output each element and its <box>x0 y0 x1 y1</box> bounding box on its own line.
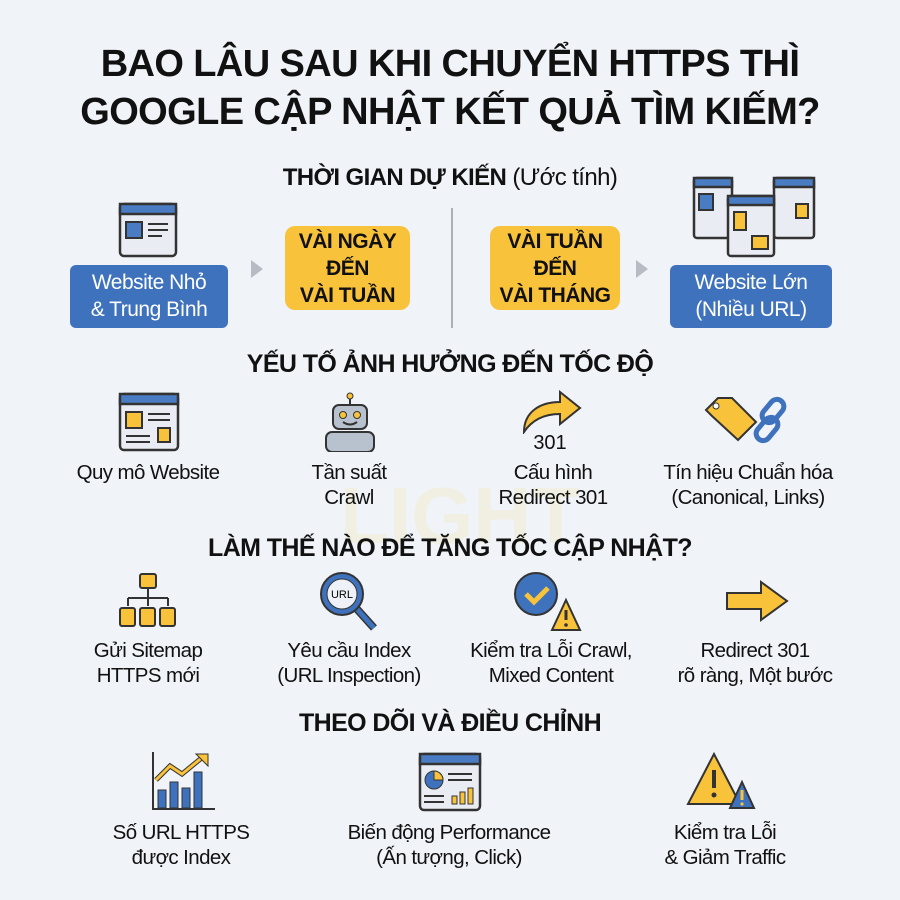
label: Crawl <box>324 486 374 509</box>
title <box>80 42 820 133</box>
icon: large website <box>692 176 816 258</box>
label: Kiểm tra Lỗi Crawl, <box>470 639 632 662</box>
label <box>113 821 249 869</box>
icon: small website <box>118 202 178 258</box>
box: website nhỏ <box>70 265 228 328</box>
badge: vài ngày <box>285 226 410 310</box>
arrow 2 <box>636 260 648 278</box>
box: website nhỏ: & Trung Bình <box>91 298 207 321</box>
icon: chart <box>152 752 215 810</box>
label: Cấu hình <box>514 461 592 484</box>
badge: vài ngày: VÀI NGÀY <box>299 230 396 253</box>
label: Biến động Performance <box>348 821 550 844</box>
divider <box>451 208 453 328</box>
label: được Index <box>132 846 230 869</box>
watermark: LIGHT <box>340 471 580 560</box>
label: Tần suất <box>312 461 386 484</box>
label: (Ấn tượng, Click) <box>376 846 522 869</box>
label: Kiểm tra Lỗi <box>674 821 776 844</box>
label: Tín hiệu Chuẩn hóa <box>663 461 833 484</box>
label: Redirect 301 <box>498 486 608 509</box>
label <box>312 461 387 509</box>
icon: performance dashboard <box>418 752 482 812</box>
box: website nhỏ: Website Nhỏ <box>92 271 206 294</box>
label <box>678 639 832 687</box>
badge: vài tuần <box>490 226 620 310</box>
icon: website scale <box>118 392 180 452</box>
label: Số URL HTTPS <box>113 821 249 844</box>
title: BAO LÂU SAU KHI CHUYỂN HTTPS THÌ <box>101 43 799 85</box>
badge: vài ngày: ĐẾN <box>326 257 369 280</box>
heading: yếu tố: YẾU TỐ ẢNH HƯỞNG ĐẾN TỐC ĐỘ <box>247 350 653 378</box>
title: GOOGLE CẬP NHẬT KẾT QUẢ TÌM KIẾM? <box>80 91 820 133</box>
heading: làm thế nào: LÀM THẾ NÀO ĐỂ TĂNG TỐC CẬP NHẬT? <box>208 534 692 562</box>
label: Yêu cầu Index <box>287 639 411 662</box>
label <box>664 821 786 869</box>
label: rõ ràng, Một bước <box>678 664 832 687</box>
icon: right arrow <box>726 580 789 622</box>
label: Redirect 301 <box>700 639 810 662</box>
label: HTTPS mới <box>97 664 199 687</box>
label <box>470 639 632 687</box>
label <box>348 821 550 869</box>
icon: warnings <box>686 752 756 809</box>
label: & Giảm Traffic <box>664 846 786 869</box>
label: Quy mô Website <box>77 461 219 484</box>
label <box>663 461 834 509</box>
label <box>94 639 202 687</box>
label <box>498 461 608 509</box>
label: (URL Inspection) <box>277 664 421 687</box>
heading: thời gian dự kiến: THỜI GIAN DỰ KIẾN (Ước tính) <box>283 164 617 191</box>
icon: robot <box>325 392 375 452</box>
box: website lớn: Website Lớn <box>695 271 807 294</box>
text 301: 301 <box>533 432 567 454</box>
box: website lớn <box>670 265 832 328</box>
badge: vài tuần: VÀI THÁNG <box>500 284 610 307</box>
badge: vài tuần: ĐẾN <box>534 257 576 280</box>
icon: check and warning <box>514 572 582 631</box>
arrow 1 <box>251 260 263 278</box>
label <box>277 639 421 687</box>
badge: vài tuần: VÀI TUẦN <box>507 230 603 253</box>
label: Mixed Content <box>489 664 613 687</box>
icon: sitemap <box>119 573 176 627</box>
heading: theo dõi: THEO DÕI VÀ ĐIỀU CHỈNH <box>299 709 601 737</box>
label: Gửi Sitemap <box>94 639 202 662</box>
label: (Canonical, Links) <box>671 486 825 509</box>
box: website lớn: (Nhiều URL) <box>695 298 807 321</box>
icon: URL magnifier: URL <box>331 589 353 601</box>
icon: tag and link <box>704 396 786 444</box>
badge: vài ngày: VÀI TUẦN <box>300 284 395 307</box>
icon: URL magnifier <box>320 572 377 631</box>
icon: redirect arrow <box>523 390 582 434</box>
